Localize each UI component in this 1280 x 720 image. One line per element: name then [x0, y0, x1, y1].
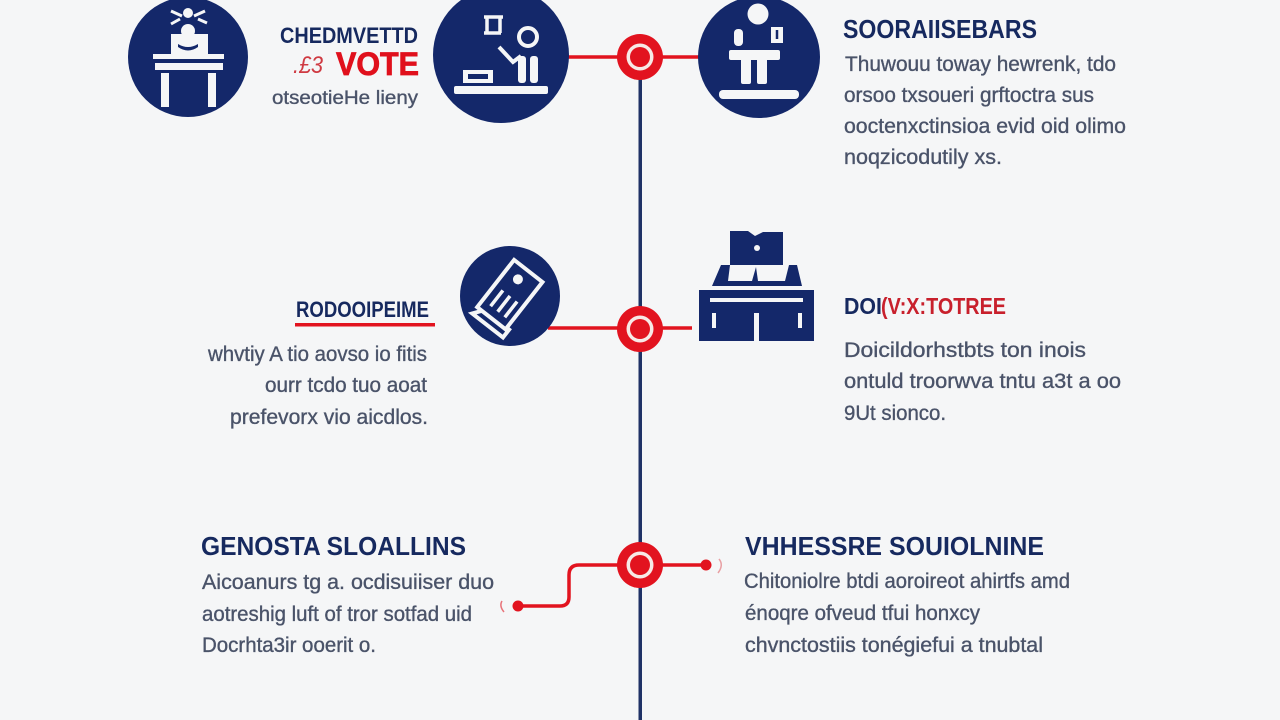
- text block: middle right: 9Ut sionco.: [844, 402, 946, 425]
- timeline spine: [638, 57, 642, 720]
- icon: presenter at desk: [433, 0, 569, 123]
- connector: middle row: [548, 326, 692, 330]
- node: top: [617, 34, 663, 80]
- text block: top right: SOORAIISEBARS: [843, 14, 1037, 44]
- text block: bottom right: chvnctostiis tonégiefui a tnubtal: [745, 634, 1043, 657]
- text block: bottom left: aotreshig luft of tror sotfad uid: [202, 603, 472, 626]
- text block: bottom left: Docrhta3ir ooerit o.: [202, 634, 376, 657]
- text block: top right: ooctenxctinsioa evid oid olimo: [844, 115, 1126, 138]
- text block: middle right: (V:X:TOTREE: [881, 293, 1006, 319]
- text block: middle left: RODOOIPEIME: [296, 297, 429, 322]
- text block: middle right: ontuld troorwva tntu a3t a oo: [844, 370, 1121, 393]
- icon: person at table: [698, 0, 820, 118]
- node: middle: [617, 306, 663, 352]
- text block: middle right: Doicildorhstbts ton inois: [844, 339, 1086, 362]
- node: bottom: [617, 542, 663, 588]
- text block: bottom left: GENOSTA SLOALLINS: [201, 531, 466, 561]
- text block: middle right: DOI: [844, 293, 882, 319]
- text block: bottom left: [201, 531, 494, 657]
- text block: bottom right: énoqre ofveud tfui honxcy: [745, 602, 980, 625]
- icon: ballot box on desk: [699, 231, 814, 341]
- connector: bottom left: [501, 565, 640, 612]
- text block: top left vote: CHEDMVETTD: [280, 23, 418, 48]
- text block: top left vote: [272, 23, 419, 109]
- connector: bottom right: [640, 559, 721, 573]
- text block: middle right: [844, 293, 1121, 425]
- text block: bottom left: Aicoanurs tg a. ocdisuiiser duo: [202, 571, 494, 594]
- text block: top left vote: VOTE: [336, 46, 419, 82]
- text block: bottom right: VHHESSRE SOUIOLNINE: [745, 531, 1044, 561]
- text block: bottom right: [744, 531, 1070, 657]
- text block: top right: noqzicodutily xs.: [844, 146, 1002, 169]
- text block: top left vote: .£3: [293, 52, 324, 79]
- text block: middle left: [207, 297, 435, 429]
- connector: top row: [566, 55, 700, 59]
- icon: ballot ticket: [460, 246, 560, 346]
- icon: podium with speaker: [128, 0, 248, 117]
- text block: top right: [843, 14, 1126, 169]
- text block: top right: Thuwouu toway hewrenk, tdo: [845, 53, 1116, 76]
- text block: middle left: ourr tcdo tuo aoat: [265, 374, 427, 397]
- text block: middle left: prefevorx vio aicdlos.: [230, 406, 428, 429]
- text block: top right: orsoo txsoueri grftoctra sus: [844, 84, 1094, 107]
- text block: middle left: whvtiy A tio aovso io fitis: [207, 343, 427, 366]
- text block: bottom right: Chitoniolre btdi aoroireot ahirtfs amd: [744, 570, 1070, 593]
- text block: top left vote: otseotieHe lieny: [272, 88, 419, 109]
